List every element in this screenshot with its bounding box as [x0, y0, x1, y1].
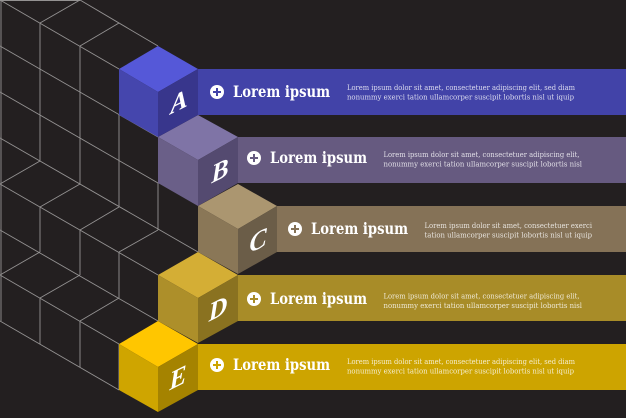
letter E: E	[168, 358, 187, 396]
cube D	[158, 252, 238, 343]
text block C: Lorem ipsum dolor sit amet, consectetuer exerci	[424, 221, 593, 230]
text block E: nonummy exerci tation ullamcorper suscipit lobortis nisl ut iquip	[347, 366, 574, 376]
bar E	[198, 344, 626, 390]
text block E: Lorem ipsum dolor sit amet, consectetuer adipiscing elit, sed diam	[347, 357, 575, 366]
icon: plus C	[288, 222, 302, 236]
cube C	[198, 184, 277, 274]
letter A: A	[168, 82, 188, 121]
icon: plus A	[210, 85, 224, 99]
isometric wireframe grid	[0, 0, 198, 390]
bar B	[238, 137, 626, 183]
text block B: nonummy exerci tation ullamcorper suscipit lobortis nisl	[384, 160, 583, 168]
icon: plus E	[210, 358, 224, 372]
letter B: B	[210, 151, 229, 189]
heading A: Lorem ipsum	[233, 82, 331, 101]
letter D: D	[208, 289, 227, 328]
text block D: nonummy exerci tation ullamcorper suscipit lobortis nisl	[384, 301, 583, 310]
icon: plus B	[247, 151, 261, 165]
bar A	[198, 69, 626, 115]
bar C	[277, 206, 626, 252]
heading B: Lorem ipsum	[270, 148, 368, 167]
heading E: Lorem ipsum	[233, 355, 331, 374]
cube B	[158, 115, 238, 206]
cube E	[119, 321, 198, 412]
text block D: Lorem ipsum dolor sit amet, consectetuer adipiscing elit,	[384, 292, 580, 300]
heading D: Lorem ipsum	[270, 289, 368, 308]
cube A	[119, 46, 198, 137]
icon: plus D	[247, 292, 261, 306]
bar D	[238, 275, 626, 321]
text block B: Lorem ipsum dolor sit amet, consectetuer adipiscing elit,	[384, 150, 580, 159]
heading C: Lorem ipsum	[311, 219, 409, 238]
text block A: Lorem ipsum dolor sit amet, consectetuer adipiscing elit, sed diam	[347, 83, 575, 92]
letter C: C	[249, 221, 267, 259]
text block A: nonummy exerci tation ullamcorper suscipit lobortis nisl ut iquip	[347, 92, 574, 102]
text block C: tation ullamcorper suscipit lobortis nisl ut iquip	[424, 230, 592, 240]
